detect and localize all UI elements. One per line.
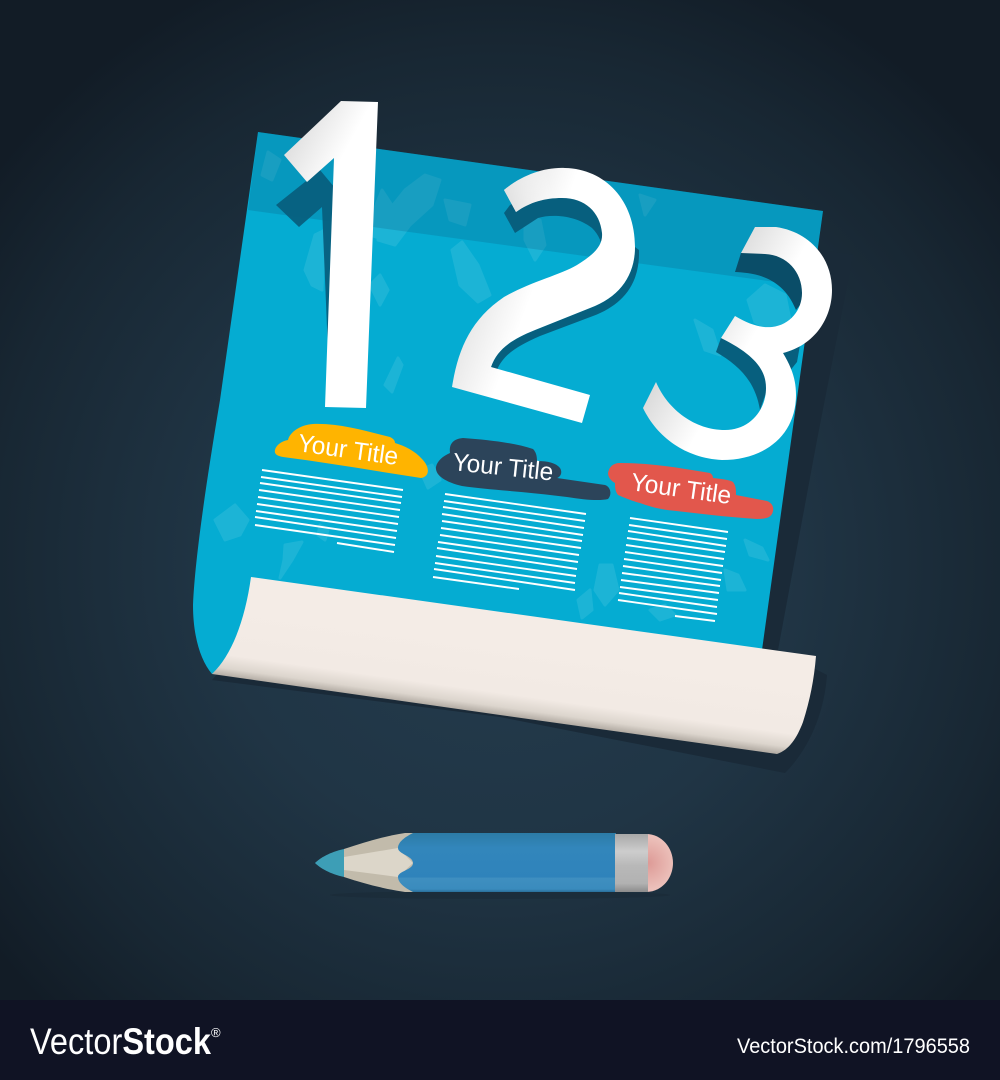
digit 2 [452,168,635,423]
pencil body [398,833,616,892]
pencil ferrule [615,834,648,892]
column 1: yellow title: Your Title [296,429,400,471]
panel: blue paper sheet [193,132,823,674]
column 1: yellow title [275,424,428,478]
pencil wood tip [344,833,415,892]
icon: pencil [315,833,673,899]
footer bar [0,1000,1000,1080]
panel: curled paper flap [212,577,816,754]
digit shadows [276,170,804,410]
column 3: red title: Your Title [629,468,733,510]
column 2: navy title [436,438,610,500]
column 3: text lines [618,518,728,621]
column 1: text lines [255,470,403,552]
digit 1 [284,101,378,408]
column 2: navy title: Your Title [451,448,555,487]
pencil lead [315,849,344,877]
column 3: red title [608,463,773,519]
footer url: VectorStock.com/1796558 [737,1035,970,1058]
registered mark: ® [211,1025,221,1040]
digit 3 [643,227,832,460]
footer logo: VectorStock [30,1021,211,1062]
paper splotch texture [215,152,790,620]
pencil shadow [330,891,670,899]
pencil eraser [646,834,673,892]
sheet drop shadows [212,245,853,773]
column 2: text lines [433,494,586,590]
darker top band [248,132,823,287]
